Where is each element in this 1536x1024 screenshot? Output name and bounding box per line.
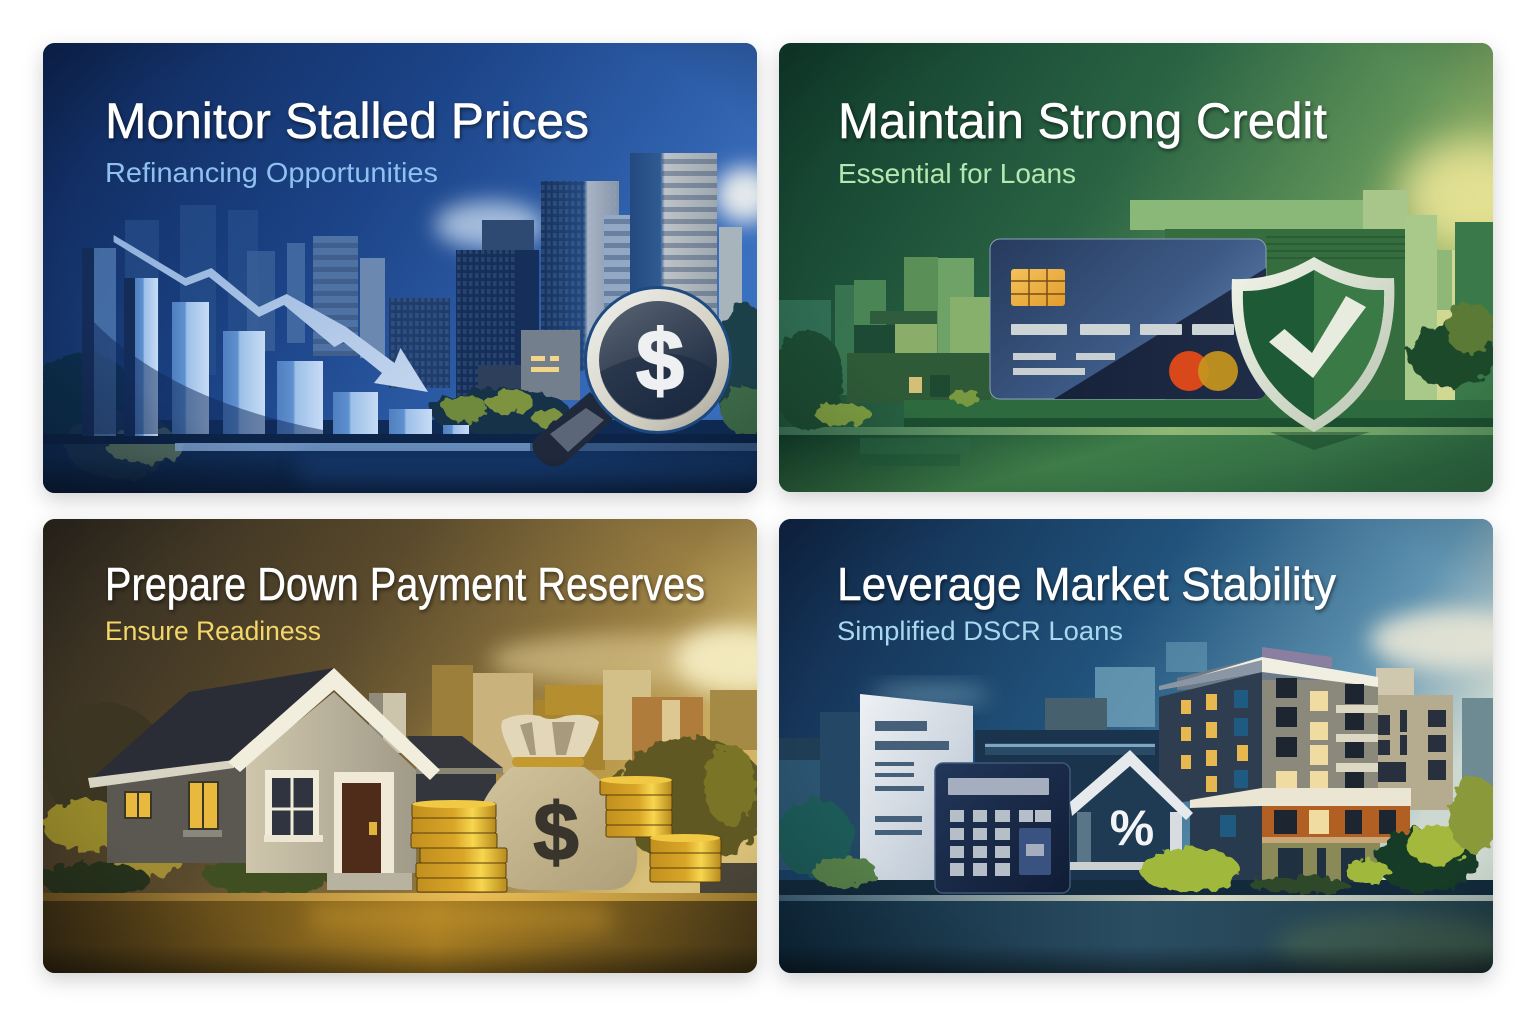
heading: Monitor Stalled Prices	[105, 93, 589, 149]
icon: house	[88, 668, 503, 890]
heading: Prepare Down Payment Reserves	[105, 558, 705, 610]
icon: shield with check	[1232, 257, 1394, 450]
background buildings	[779, 642, 1493, 895]
panel: Leverage Market Stability	[777, 519, 1530, 975]
background buildings	[779, 190, 1493, 410]
foliage	[777, 777, 1501, 893]
icon: magnifying glass with dollar	[532, 286, 732, 467]
icon: house with percent: %	[1110, 800, 1154, 856]
arrow: downward trend	[114, 235, 428, 392]
bar chart: falling prices	[82, 248, 469, 436]
icon: coin stacks	[411, 776, 721, 892]
heading: Leverage Market Stability	[837, 558, 1336, 610]
subheading: Refinancing Opportunities	[105, 157, 438, 188]
subheading: Ensure Readiness	[105, 616, 321, 646]
icon: credit card	[990, 239, 1266, 399]
heading: Maintain Strong Credit	[838, 93, 1327, 149]
foliage	[772, 302, 1496, 430]
subheading: Essential for Loans	[838, 158, 1076, 189]
subheading: Simplified DSCR Loans	[837, 616, 1123, 646]
icon: apartment building	[1159, 647, 1411, 883]
icon: money bag: $	[533, 787, 579, 878]
icon: magnifying glass with dollar: $	[636, 313, 684, 409]
panel: Prepare Down Payment Reserves	[40, 519, 795, 973]
icon: money bag	[476, 715, 637, 890]
background buildings	[432, 665, 757, 775]
panel: Monitor Stalled Prices	[35, 43, 775, 493]
panel: Maintain Strong Credit	[772, 43, 1536, 492]
city buildings	[247, 153, 742, 405]
foliage	[40, 703, 770, 898]
icon: calculator	[935, 763, 1070, 893]
icon: house with percent	[1070, 750, 1193, 870]
icon: document	[860, 694, 973, 880]
foliage	[35, 304, 775, 479]
